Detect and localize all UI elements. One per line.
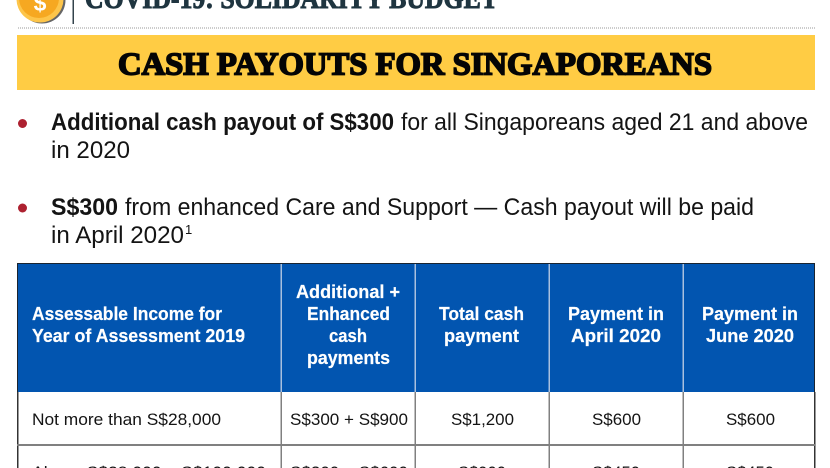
table header row: Payment in [568,303,664,324]
table header row: payments [307,347,390,368]
table header row: Enhanced [307,303,390,324]
table [17,263,816,468]
table grid lines [17,392,816,468]
table header row [17,263,815,392]
section banner [17,35,815,90]
header divider line [72,0,74,24]
table row: not more than S$28,000: S$300 + S$900 [290,410,408,429]
table row: above S$28,000 to S$100,000 [32,463,774,468]
table row: not more than S$28,000: S$1,200 [451,410,514,429]
table header row: Assessable Income for [32,303,222,324]
bullet: additional cash payout: for all Singaporeans aged 21 and above [401,109,808,136]
table header row: April 2020 [571,325,661,346]
table row: not more than S$28,000 [32,410,775,429]
table header row: Payment in [702,303,798,324]
bullet: care and support: from enhanced Care and Support — Cash payout will be paid [125,194,754,221]
table header row: June 2020 [706,325,794,346]
table row: not more than S$28,000: S$600 [592,410,641,429]
table header row: cash [329,325,367,346]
bullet: care and support: S$300 [51,194,118,221]
table row: not more than S$28,000: Not more than S$28,000 [32,410,221,429]
icon: dollar coin [16,0,66,24]
table header row: Total cash [439,303,524,324]
section banner: CASH PAYOUTS FOR SINGAPOREANS [118,46,712,82]
bullet: additional cash payout: Additional cash payout of S$300 [51,109,394,136]
bullet: care and support: 1 [185,222,192,237]
table row: not more than S$28,000: S$600 [726,410,775,429]
table header row: payment [444,325,519,346]
bullet: additional cash payout [18,109,808,164]
bullet: additional cash payout: in 2020 [51,137,130,164]
bullet: care and support [18,194,754,249]
table header row: Additional + [296,281,400,302]
table header row: Year of Assessment 2019 [32,325,245,346]
bullet: care and support: in April 2020 [51,222,184,249]
